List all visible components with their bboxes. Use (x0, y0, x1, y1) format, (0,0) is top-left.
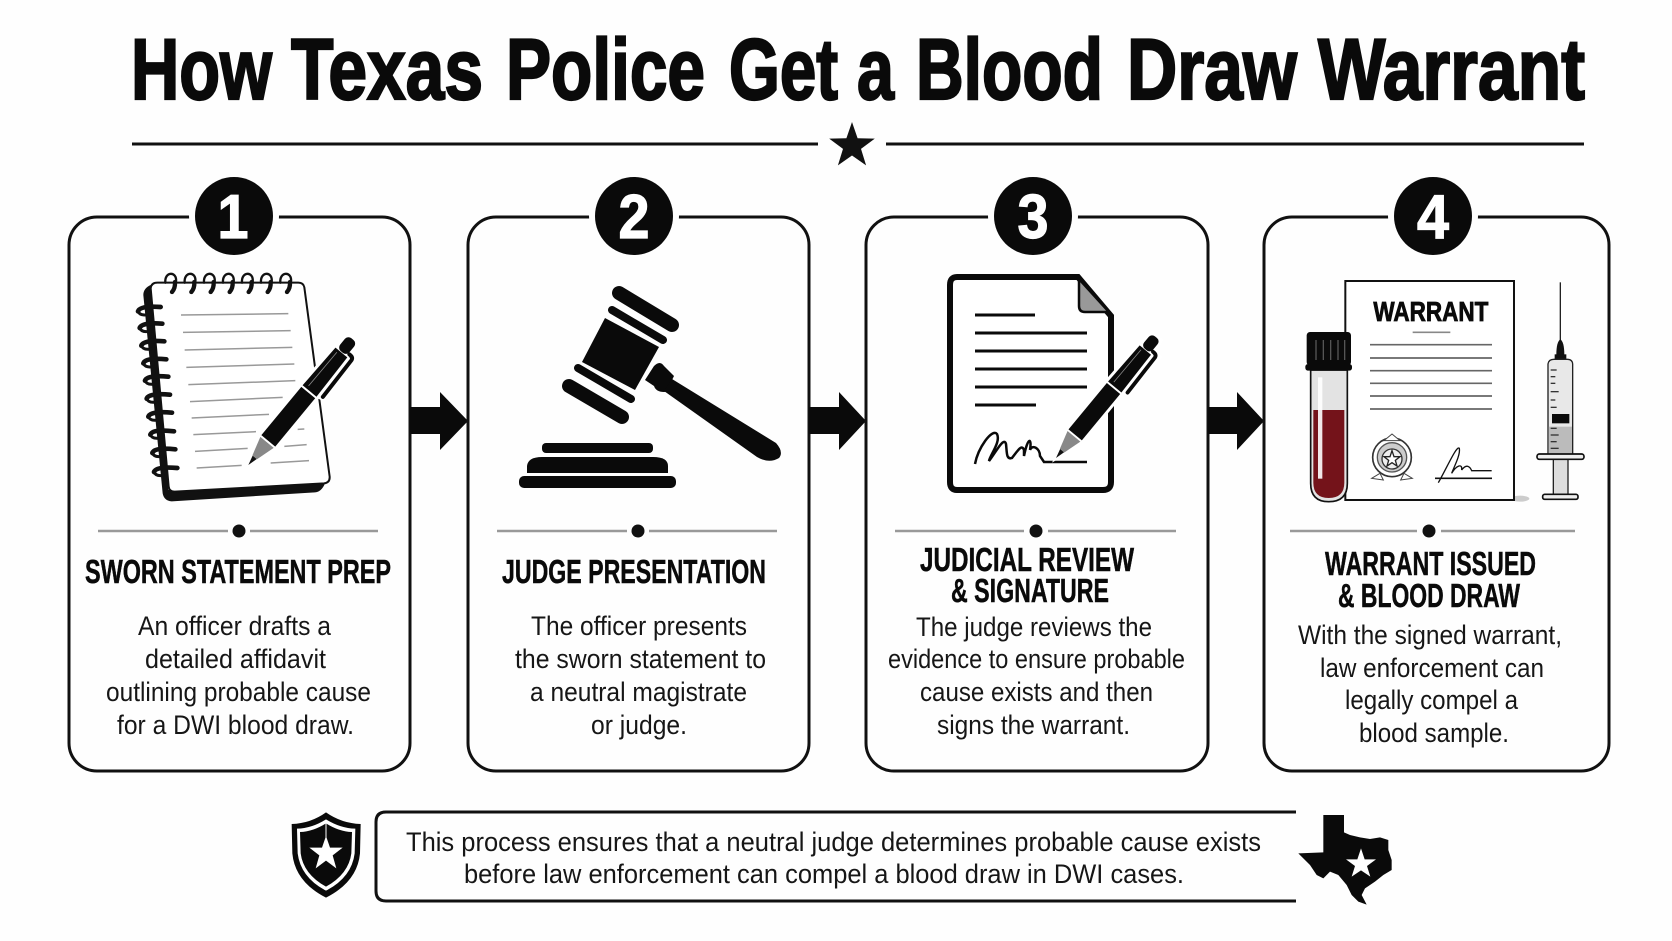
description (515, 611, 766, 740)
description (888, 612, 1185, 740)
heading: judicial review and signature (920, 541, 1135, 609)
separator (98, 524, 378, 538)
callout: summary box (376, 812, 1296, 901)
title: Police (506, 22, 705, 118)
step number 4: 4 (1417, 183, 1449, 252)
title (131, 22, 1585, 118)
description: The officer presents (531, 611, 747, 641)
heading: warrant issued and blood draw (1325, 545, 1536, 614)
description: for a DWI blood draw. (117, 710, 354, 740)
arrow: step 3 to 4 (1208, 392, 1264, 450)
step number 1 (189, 171, 279, 261)
description: detailed affidavit (145, 644, 327, 674)
description: evidence to ensure probable (888, 644, 1185, 674)
step number 2: 2 (618, 183, 650, 252)
title: Warrant (1318, 22, 1585, 118)
description: cause exists and then (920, 677, 1153, 707)
description (1298, 620, 1562, 748)
step number 3 (988, 171, 1078, 261)
description: law enforcement can (1320, 653, 1544, 683)
icon: gavel (519, 293, 781, 488)
title divider with star (132, 122, 1584, 165)
arrow: step 1 to 2 (410, 392, 468, 450)
title: Texas (291, 22, 483, 118)
icon: warrant document, blood tube and syringe (1305, 281, 1584, 502)
step number 2 (589, 171, 679, 261)
separator (895, 524, 1176, 538)
icon: warrant document, blood tube and syringe: WARRANT (1373, 296, 1488, 327)
heading: judicial review and signature: & SIGNATURE (951, 572, 1109, 609)
description: outlining probable cause (106, 677, 371, 707)
heading: sworn statement prep: SWORN STATEMENT PREP (85, 553, 391, 590)
separator (497, 524, 777, 538)
icon: police shield with star (292, 812, 361, 898)
description: legally compel a (1345, 685, 1518, 715)
description (106, 611, 371, 740)
title: Blood (916, 22, 1103, 118)
description: The judge reviews the (916, 612, 1152, 642)
step number 3: 3 (1018, 183, 1048, 252)
panel: step 4 warrant issued and blood draw (1264, 171, 1609, 771)
panel: step 2 judge presentation (468, 171, 809, 771)
icon: Texas map with star (1298, 815, 1392, 905)
title: How (131, 22, 273, 118)
description: signs the warrant. (937, 710, 1130, 740)
description: the sworn statement to (515, 644, 766, 674)
panel: step 1 sworn statement prep (69, 171, 410, 771)
summary text (406, 827, 1261, 889)
heading: warrant issued and blood draw: WARRANT ISSUED (1325, 545, 1536, 582)
description: or judge. (591, 710, 687, 740)
title: Get (729, 22, 838, 118)
description: a neutral magistrate (530, 677, 747, 707)
description: An officer drafts a (138, 611, 331, 641)
summary text: This process ensures that a neutral judge determines probable cause exists (406, 827, 1261, 857)
heading: judge presentation: JUDGE PRESENTATION (502, 553, 766, 590)
arrow: step 2 to 3 (809, 392, 866, 450)
step number 1: 1 (218, 183, 248, 252)
summary text: before law enforcement can compel a blood draw in DWI cases. (464, 859, 1184, 889)
icon: document with pen signing (950, 277, 1168, 490)
separator (1290, 524, 1575, 538)
heading: judicial review and signature: JUDICIAL REVIEW (920, 541, 1135, 578)
title: Draw (1127, 22, 1298, 118)
panel: step 3 judicial review and signature (866, 171, 1208, 771)
description: With the signed warrant, (1298, 620, 1562, 650)
description: blood sample. (1359, 718, 1509, 748)
title: a (857, 22, 895, 118)
icon: spiral notepad and pen (138, 274, 365, 501)
heading: warrant issued and blood draw: & BLOOD DRAW (1338, 577, 1521, 614)
step number 4 (1388, 171, 1478, 261)
